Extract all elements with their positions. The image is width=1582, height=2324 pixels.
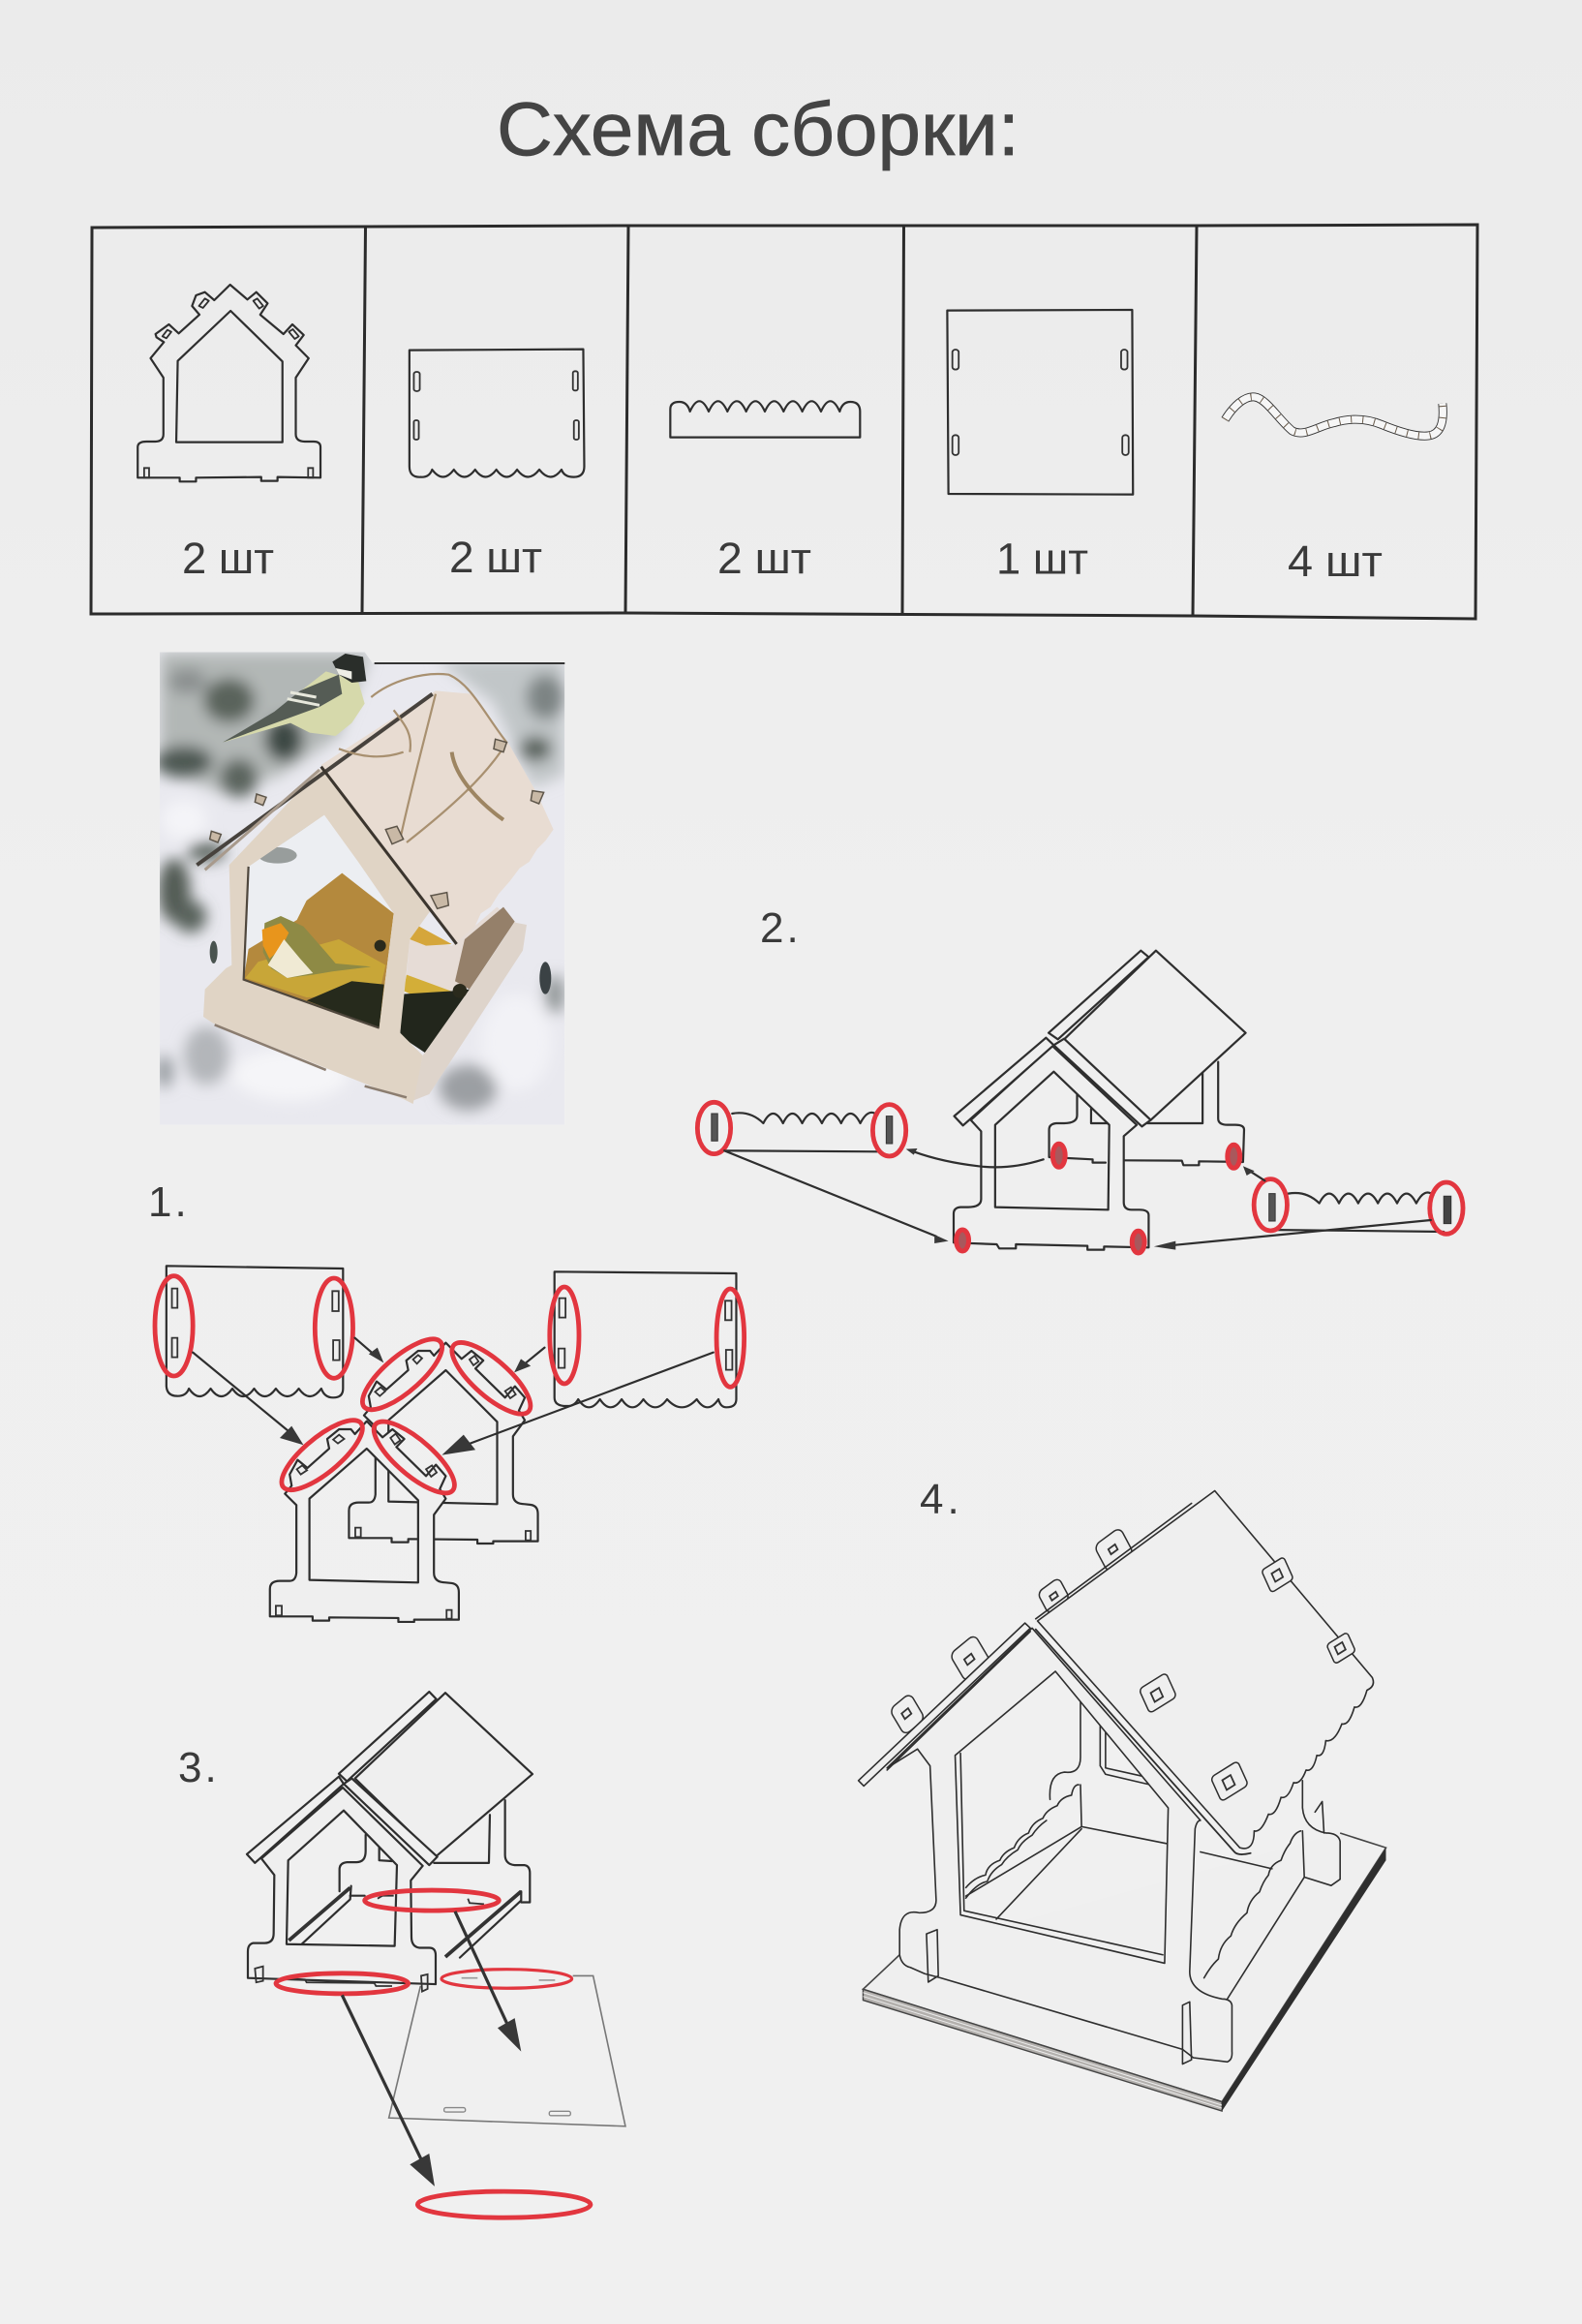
arrow: right board to back wall — [1243, 1166, 1264, 1180]
step 4 front wall — [887, 1628, 1232, 2062]
step 4 back wall and floor — [966, 1700, 1304, 1999]
step 2 roof — [955, 951, 1246, 1126]
arrow: front wall to floor — [342, 1995, 435, 2186]
step 1 diagram — [155, 1266, 745, 1622]
step 3 roof — [247, 1692, 532, 1865]
step 2 front house — [954, 1046, 1148, 1250]
photo: seed speckles — [210, 940, 551, 998]
step label 2: 2. — [760, 904, 802, 952]
step 1 red highlights — [155, 1276, 745, 1502]
arrow: right panel to back wall — [514, 1348, 544, 1372]
text: 4 pcs rope: 4 шт — [1288, 536, 1383, 586]
photo: twine — [339, 674, 506, 842]
step 4 base plate — [863, 1833, 1386, 2111]
part: side board — [670, 401, 860, 438]
step 1 front house wall — [270, 1422, 459, 1622]
arrow: left board to front wall — [724, 1150, 949, 1243]
text: 2 pcs board: 2 шт — [717, 534, 811, 583]
step label 1: 1. — [148, 1178, 190, 1226]
step 4 right scalloped board and wall — [1204, 1781, 1340, 1978]
part: house wall — [137, 285, 320, 481]
photo: great tit — [223, 654, 366, 743]
step 2 right board — [1264, 1193, 1451, 1232]
step 2 back house — [1050, 1062, 1244, 1165]
part: roof panel — [410, 350, 584, 477]
photo: front wall — [203, 768, 431, 1104]
step 4 assembled feeder — [859, 1491, 1386, 2111]
step 3 floor sheet — [389, 1975, 625, 2126]
photo: finished bird feeder — [155, 652, 566, 1126]
step 3 side boards — [289, 1886, 521, 1958]
step 2 left board — [712, 1113, 893, 1151]
step 4 left scalloped board — [966, 1785, 1079, 1898]
part: floor — [947, 310, 1133, 495]
step label 4: 4. — [920, 1476, 963, 1523]
arrow: back wall to left board — [906, 1148, 1044, 1167]
step 4 roof — [859, 1491, 1374, 1854]
arrow: right board to front wall — [1154, 1220, 1431, 1250]
part: rope — [1225, 397, 1443, 436]
step 3 wall tabs — [255, 1896, 484, 1992]
photo: roof edges — [197, 694, 433, 865]
photo: robin — [262, 916, 371, 978]
step 1 roof panel left — [167, 1266, 343, 1397]
step 1 roof panel right — [555, 1271, 736, 1407]
parts table — [91, 225, 1477, 619]
text: 2 pcs roof: 2 шт — [449, 533, 542, 582]
photo: tabs — [210, 739, 544, 908]
step 3 front house — [248, 1788, 436, 1984]
photo: tray side board — [413, 923, 527, 1101]
step 3 diagram — [247, 1692, 625, 2217]
arrow: left panel to front wall — [193, 1353, 303, 1445]
arrow: right panel to front wall — [441, 1353, 714, 1455]
photo: back roof panel — [321, 690, 554, 944]
step 1 tab holes — [276, 1355, 531, 1619]
photo: feeder interior — [277, 819, 330, 864]
text: 1 pc floor: 1 шт — [996, 535, 1088, 583]
step 2 red highlights — [697, 1102, 1463, 1253]
step label 3: 3. — [178, 1744, 220, 1791]
arrow: back wall to floor — [455, 1911, 521, 2052]
step 1 back house wall — [349, 1343, 538, 1544]
step 4 roof side tabs — [1139, 1557, 1355, 1802]
step 2 diagram — [697, 951, 1463, 1253]
text: 2 pcs wall: 2 шт — [182, 534, 274, 583]
arrow: left panel to back wall — [355, 1338, 383, 1362]
step 3 red highlights — [276, 1890, 591, 2217]
step 4 ridge tabs — [890, 1527, 1134, 1735]
title: Схема сборки: — [497, 86, 1019, 171]
step 4 window and slots — [927, 1754, 1192, 2064]
step 3 back house — [340, 1800, 530, 1902]
